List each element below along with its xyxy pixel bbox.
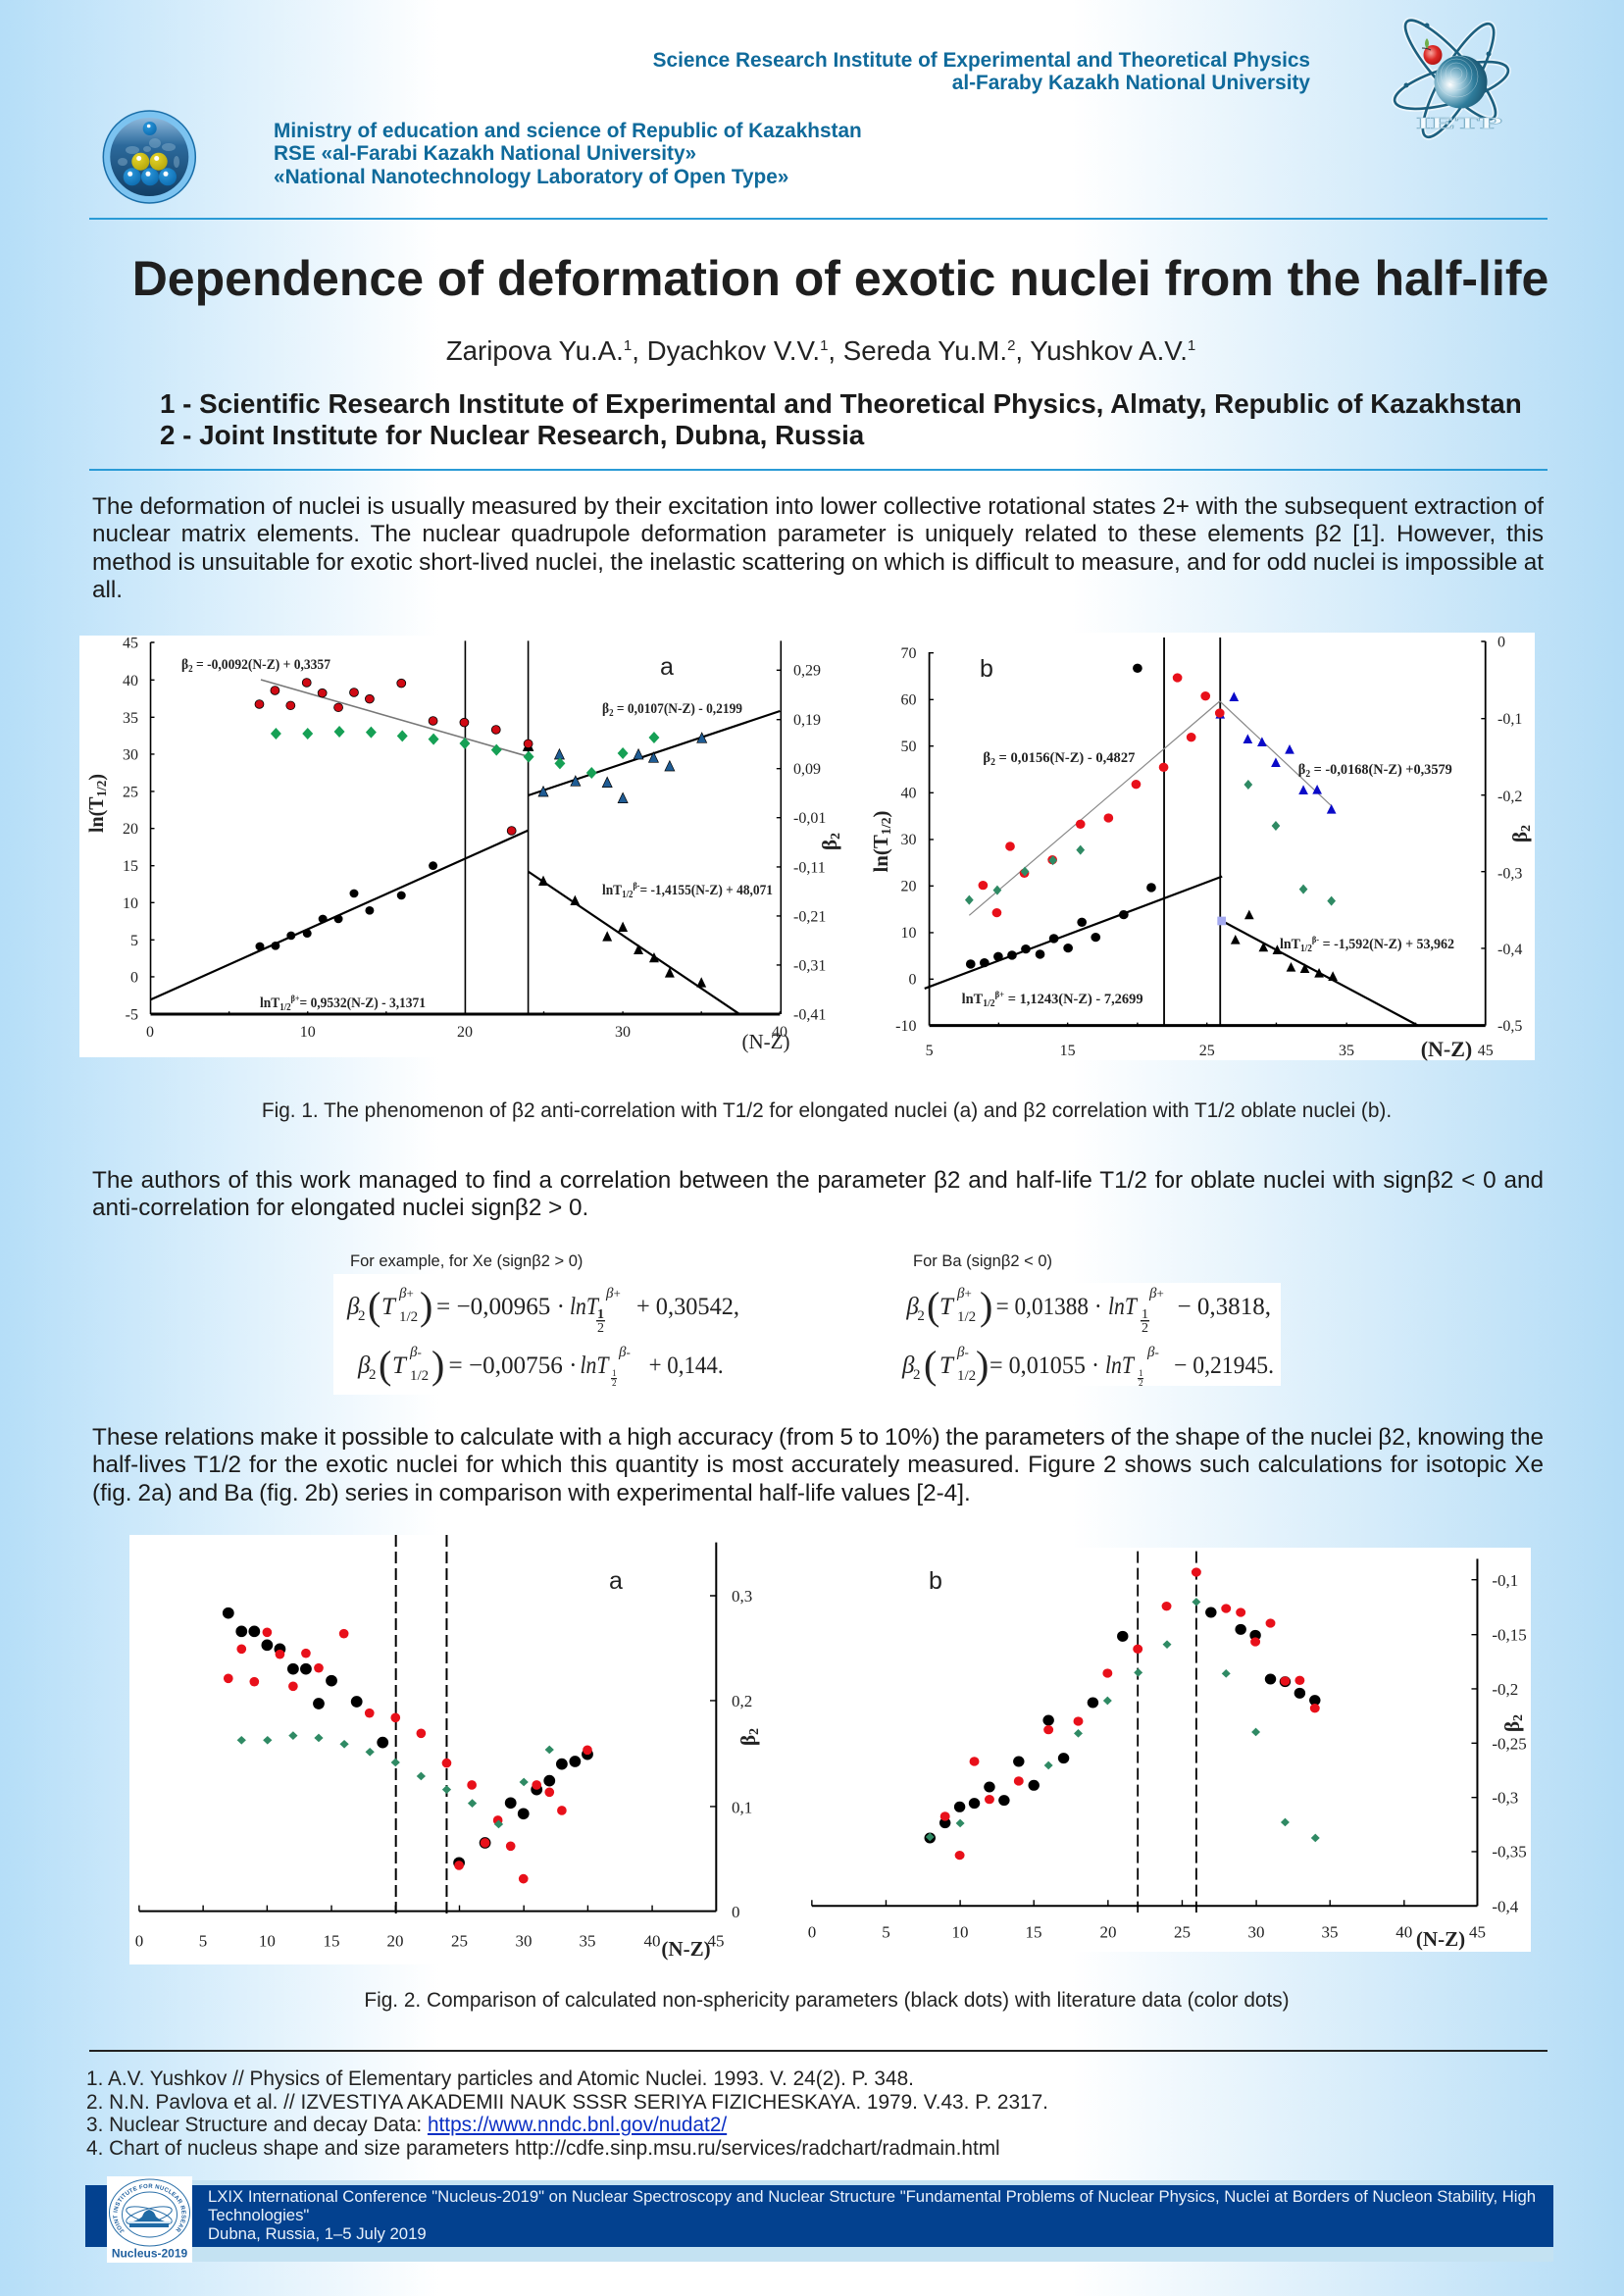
y axis title 1b: 1/2 [880, 817, 894, 835]
right axis title 2b: β [1500, 1721, 1524, 1732]
formula Ba beta minus: 2 [913, 1367, 920, 1383]
right axis numbers 2a: 0,3 [732, 1587, 752, 1606]
equations 1b: = -0,0168(N-Z) +0,3579 [1310, 762, 1452, 778]
right axis title 2b: 2 [1511, 1714, 1526, 1721]
formula Xe beta plus: 1 [597, 1307, 604, 1322]
x axis numbers 2a: 0 [135, 1932, 143, 1950]
equations 1a: β [602, 701, 610, 717]
right axis numbers 2b: -0,4 [1492, 1897, 1519, 1916]
formula Ba beta plus: lnT [1108, 1294, 1139, 1320]
equations 1b: β [983, 750, 990, 766]
equations 1b: 1/2 [1300, 944, 1312, 954]
x axis title 1a: (N-Z) [742, 1030, 789, 1053]
formula Ba beta minus: T [939, 1352, 955, 1379]
formula Xe beta minus: 1 [612, 1368, 616, 1378]
data points 2a [223, 1607, 593, 1883]
axes and guides 2a [139, 1535, 716, 1918]
right axis numbers 1b: -0,2 [1497, 789, 1522, 805]
equations 1a: 1/2 [279, 1002, 291, 1013]
heading: ministry and laboratory: RSE «al-Farabi Kazakh National University» [274, 142, 696, 165]
light band [192, 2180, 1553, 2262]
formula Xe beta plus: T [381, 1294, 397, 1320]
intro paragraph: nuclear matrix elements. The nuclear quadrupole deformation parameter is uniquely related to these elements β2 [1]. However, this [92, 521, 1544, 547]
formula Ba beta minus: lnT [1105, 1352, 1136, 1379]
intro paragraph: all. [92, 577, 123, 603]
right axis numbers 2b: -0,2 [1492, 1680, 1518, 1699]
relations paragraph: (fig. 2a) and Ba (fig. 2b) series in comparison with experimental half-life values [2-4]. [92, 1480, 971, 1506]
heading: institute name: Science Research Institute of Experimental and Theoretical Physics [653, 49, 1310, 72]
x axis numbers 1b: 5 [926, 1043, 934, 1059]
heading: institute name [653, 49, 1310, 94]
title: Dependence of deformation of exotic nuclei from the half-life [132, 251, 1548, 306]
y axis title 1b: ) [869, 810, 892, 817]
right axis numbers 2b [1492, 1571, 1527, 1916]
axis labels 1a: 25 [123, 785, 138, 800]
x axis numbers 2b: 20 [1100, 1922, 1116, 1942]
y axis title 1a: ) [84, 774, 108, 781]
label: Ba example: For Ba (signβ2 < 0) [913, 1252, 1052, 1270]
right axis numbers 2b: -0,3 [1492, 1789, 1518, 1807]
x axis numbers 2b: 0 [808, 1922, 816, 1942]
formula Ba beta plus: 2 [1142, 1321, 1148, 1336]
logo: IETP atom: IETP [1416, 114, 1502, 132]
x axis title 2a: (N-Z) [661, 1937, 711, 1961]
left axis numbers 1b: 40 [900, 785, 916, 802]
logo: JINR Nucleus-2019: Nucleus-2019 [112, 2246, 188, 2260]
intro paragraph: The deformation of nuclei is usually measured by their excitation into lower collective rotational states 2+ with the subsequent extraction of [92, 493, 1544, 520]
x axis numbers 1a [146, 1024, 787, 1041]
y axis title 1a: ln(T [84, 794, 108, 833]
left axis numbers 1b: 10 [900, 925, 916, 942]
x axis numbers 2b: 35 [1322, 1922, 1338, 1942]
x axis numbers 2a: 40 [643, 1932, 661, 1950]
axis labels 1a: 0 [130, 969, 138, 987]
equations 1b: = 0,0156(N-Z) - 0,4827 [995, 750, 1136, 766]
references: 2. N.N. Pavlova et al. // IZVESTIYA AKADEMII NAUK SSSR SERIYA FIZICHESKAYA. 1979. V.43. P. 2317. [86, 2091, 1048, 2114]
formula Ba beta plus: 2 [917, 1308, 925, 1324]
axis labels 1a: 10 [123, 895, 138, 912]
logo: IETP atom [1392, 18, 1511, 140]
x axis numbers 1a: 0 [146, 1024, 154, 1041]
text: JOINT INSTITUTE FOR NUCLEAR RESEARCH [113, 2183, 186, 2233]
intro paragraph: method is unsuitable for exotic short-lived nuclei, the inelastic scattering on which is difficult to measure, and for odd nuclei is impossible at [92, 549, 1544, 576]
x axis numbers 2a: 10 [259, 1932, 276, 1950]
x axis title 1b: (N-Z) [1421, 1037, 1472, 1061]
axis labels 1a: 45 [123, 636, 138, 651]
formula Ba beta plus: β+ [956, 1286, 972, 1301]
right axis numbers 1b [1497, 634, 1522, 1035]
right axis numbers 1a: -0,01 [793, 810, 826, 827]
formulas: Ba [901, 1283, 1281, 1388]
right axis numbers 1b: 0 [1497, 634, 1505, 651]
chart: figure 2a [129, 1535, 762, 1964]
x axis numbers 2a: 15 [324, 1932, 339, 1950]
correlation paragraph: anti-correlation for elongated nuclei signβ2 > 0. [92, 1195, 588, 1221]
formula Xe beta minus: ( [379, 1343, 391, 1387]
formula Ba beta minus [901, 1343, 1274, 1388]
conference text: Technologies" [208, 2206, 309, 2224]
formula Ba beta plus: 1/2 [957, 1309, 976, 1325]
left axis numbers 1b: -10 [895, 1018, 916, 1035]
formula Xe beta minus: 2 [369, 1367, 377, 1383]
formula Ba beta minus: = 0,01055 · [990, 1352, 1099, 1379]
heading: institute name: al-Faraby Kazakh National University [952, 72, 1310, 94]
equations 1b: β+ [995, 990, 1004, 999]
equations 1a: = -1,4155(N-Z) + 48,071 [639, 883, 773, 898]
x axis numbers 1a: 30 [615, 1024, 631, 1041]
equations 1a: = 0,9532(N-Z) - 3,1371 [300, 995, 426, 1011]
panel letter a: a [609, 1567, 623, 1595]
right axis numbers 2b: -0,1 [1492, 1571, 1518, 1590]
left axis numbers 1b: 70 [900, 645, 916, 662]
formula Xe beta minus [357, 1343, 724, 1388]
formula Ba beta minus: β- [956, 1345, 969, 1360]
panel letter a: a [660, 653, 674, 681]
right axis numbers 1a: -0,41 [793, 1006, 826, 1024]
axis labels 1a: 30 [123, 747, 138, 763]
equations 1a: 2 [609, 708, 614, 719]
formula Ba beta minus: ( [924, 1343, 937, 1387]
x axis numbers 2b: 25 [1174, 1922, 1191, 1942]
right axis numbers 1a: -0,11 [793, 859, 826, 877]
equations 1b: = 1,1243(N-Z) - 7,2699 [1004, 992, 1143, 1007]
intro paragraph [92, 493, 1544, 603]
formula Xe beta minus: β- [618, 1345, 631, 1360]
x axis numbers 2a: 20 [386, 1932, 404, 1950]
references: 4. Chart of nucleus shape and size parameters http://cdfe.sinp.msu.ru/services/radchart/radmain.html [86, 2137, 1000, 2160]
relations paragraph: half-lives T1/2 for the exotic nuclei for which this quantity is most accurately measured. Figure 2 shows such calculations for isotopic Xe [92, 1452, 1544, 1478]
axis labels 1a [123, 636, 138, 1024]
logo: JINR Nucleus-2019 [107, 2176, 192, 2263]
x axis numbers 1b: 15 [1060, 1043, 1076, 1059]
axis labels 1a: 15 [123, 858, 138, 875]
x axis numbers 1b: 45 [1478, 1043, 1494, 1059]
right axis title 1b: 2 [1519, 825, 1534, 832]
conference text [208, 2187, 1536, 2243]
relations paragraph [92, 1424, 1544, 1506]
formula Xe beta plus: β+ [398, 1286, 414, 1301]
axes and trend lines 1a [151, 640, 781, 1014]
right axis numbers 1a: 0,29 [793, 663, 821, 679]
equations 1a: = -0,0092(N-Z) + 0,3357 [193, 657, 330, 673]
left axis numbers 1b: 50 [900, 739, 916, 755]
heading: ministry and laboratory: «National Nanotechnology Laboratory of Open Type» [274, 166, 788, 188]
references: 3. Nuclear Structure and decay Data: https://www.nndc.bnl.gov/nudat2/ [86, 2114, 727, 2136]
formula Xe beta plus: + 0,30542, [636, 1294, 739, 1320]
heading: ministry and laboratory: Ministry of education and science of Republic of Kazakhstan [274, 120, 862, 142]
x axis numbers 1a: 10 [300, 1024, 316, 1041]
right axis numbers 1b: -0,5 [1497, 1018, 1522, 1035]
formula Ba beta plus: ( [927, 1284, 939, 1328]
right axis numbers 2b: -0,15 [1492, 1626, 1527, 1644]
left axis numbers 1b: 30 [900, 832, 916, 848]
formula Xe beta minus: β- [409, 1345, 422, 1360]
formula Xe beta minus: + 0,144. [649, 1352, 724, 1379]
equations 1b: β [1298, 762, 1306, 778]
conference text: Dubna, Russia, 1–5 July 2019 [208, 2224, 427, 2243]
x axis numbers 2b: 15 [1026, 1922, 1041, 1942]
formula Ba beta plus: 1 [1142, 1307, 1148, 1322]
right axis title 1a: β [818, 840, 841, 850]
affiliations: 2 - Joint Institute for Nuclear Research, Dubna, Russia [160, 420, 864, 449]
formula Ba beta plus: T [939, 1294, 955, 1320]
formula Xe beta plus: 1/2 [399, 1309, 418, 1325]
formula Xe beta plus: ) [420, 1284, 432, 1328]
formula Xe beta plus: β+ [605, 1286, 621, 1301]
chart: figure 1b [869, 633, 1535, 1061]
axis labels 1a: 35 [123, 710, 138, 727]
axes and guides 2b [812, 1552, 1477, 1913]
x axis numbers 1b: 25 [1199, 1043, 1215, 1059]
equations 1b: = -1,592(N-Z) + 53,962 [1319, 937, 1454, 952]
x axis numbers 2b: 40 [1396, 1922, 1412, 1942]
formula Ba beta minus: 2 [1139, 1378, 1143, 1388]
right axis numbers 1a: -0,21 [793, 908, 826, 926]
correlation paragraph [92, 1167, 1544, 1221]
formula Xe beta plus: = −0,00965 · [436, 1294, 565, 1320]
caption: figure 2: Fig. 2. Comparison of calculated non-sphericity parameters (black dots) with literature data (color dots) [364, 1989, 1290, 2012]
equations 1a [181, 657, 773, 1013]
affiliations [160, 388, 1522, 449]
equations 1b: 2 [990, 757, 995, 768]
right axis title 1b: β [1508, 832, 1532, 842]
caption: figure 1: Fig. 1. The phenomenon of β2 anti-correlation with T1/2 for elongated nuclei (a) and β2 correlation with T1/2 oblate nuclei (b). [262, 1099, 1392, 1122]
formula Xe beta plus: β [346, 1294, 360, 1320]
formula Ba beta plus: β+ [1148, 1286, 1164, 1301]
equations 1a: β [181, 657, 189, 673]
x axis numbers 1a: 40 [772, 1024, 787, 1041]
conference text: LXIX International Conference "Nucleus-2019" on Nuclear Spectroscopy and Nuclear Structure "Fundamental Problems of Nuclear Physics, Nuclei at Borders of Nucleon Stability, High [208, 2187, 1536, 2206]
formula Xe beta minus: = −0,00756 · [449, 1352, 577, 1379]
formula Ba beta minus: β- [1146, 1345, 1159, 1360]
axes and trend lines 1b [925, 638, 1486, 1026]
equations 1a: 2 [188, 664, 193, 675]
formula Ba beta minus: ) [976, 1343, 989, 1387]
axis labels 1a: 40 [123, 673, 138, 689]
x axis numbers 2b: 45 [1469, 1922, 1486, 1942]
equations 1a: lnT [602, 883, 625, 898]
equations 1a: β- [634, 881, 639, 891]
formula Xe beta minus: lnT [581, 1352, 610, 1379]
right axis numbers 2a: 0,2 [732, 1692, 752, 1710]
equations 1b: 1/2 [983, 998, 995, 1009]
formula Xe beta plus [346, 1284, 739, 1336]
formula Xe beta plus: 2 [597, 1321, 604, 1336]
equations 1a: β+ [291, 994, 300, 1003]
formula Xe beta plus: lnT [570, 1294, 600, 1320]
equations 1b: 2 [1305, 769, 1310, 780]
right axis title 1a: 2 [829, 833, 843, 840]
chart: figure 1a [79, 636, 843, 1057]
right axis numbers 1b: -0,1 [1497, 711, 1522, 728]
affiliations: 1 - Scientific Research Institute of Experimental and Theoretical Physics, Almaty, Republic of Kazakhstan [160, 388, 1522, 419]
conference bar [85, 2185, 1553, 2247]
equations 1b: lnT [1280, 937, 1302, 952]
y axis title 1a: 1/2 [95, 781, 110, 797]
x axis numbers 2b: 5 [882, 1922, 890, 1942]
formula Xe beta plus: ( [368, 1284, 381, 1328]
panel letter b: b [929, 1567, 942, 1595]
right axis numbers 2b: -0,25 [1492, 1734, 1527, 1754]
formula Xe beta minus: T [392, 1352, 408, 1379]
formula Ba beta plus: ) [980, 1284, 992, 1328]
formula Ba beta minus: − 0,21945. [1174, 1352, 1274, 1379]
right axis title 2a: β [736, 1735, 760, 1746]
formula Ba beta plus [905, 1284, 1271, 1336]
x axis numbers 2b: 10 [951, 1922, 969, 1942]
x axis numbers 1a: 20 [457, 1024, 473, 1041]
x axis title 2b: (N-Z) [1416, 1927, 1465, 1951]
right axis numbers 1a: 0,09 [793, 761, 821, 778]
label: Xe example: For example, for Xe (signβ2 > 0) [350, 1252, 583, 1270]
x axis numbers 2a: 45 [708, 1932, 724, 1950]
chart: figure 2b [808, 1548, 1531, 1952]
right axis numbers 2b: -0,35 [1492, 1842, 1527, 1862]
x axis numbers 2a [135, 1932, 724, 1950]
left axis numbers 1b: 60 [900, 692, 916, 708]
logo: national nanotechnology laboratory [102, 110, 196, 204]
references: 1. A.V. Yushkov // Physics of Elementary particles and Atomic Nuclei. 1993. V. 24(2). P. 348. [86, 2067, 914, 2090]
x axis numbers 2a: 30 [516, 1932, 532, 1950]
data points 1b [965, 664, 1338, 981]
equations 1a: lnT [260, 995, 282, 1011]
right axis numbers 1b: -0,4 [1497, 942, 1522, 958]
axis labels 1a: 20 [123, 821, 138, 838]
left axis numbers 1b: 20 [900, 879, 916, 894]
references [86, 2067, 1048, 2160]
data points 2b [925, 1567, 1321, 1860]
formula Xe beta minus: 2 [612, 1378, 616, 1388]
formula Xe beta minus: ) [431, 1343, 444, 1387]
right axis title 2a: 2 [747, 1728, 762, 1735]
x axis numbers 1b: 35 [1339, 1043, 1354, 1059]
right axis numbers 2a: 0,1 [732, 1799, 752, 1816]
right axis numbers 2a: 0 [732, 1903, 739, 1921]
formulas: Xe [333, 1274, 739, 1395]
equations 1b: β- [1312, 935, 1319, 944]
left axis numbers 1b: 0 [908, 971, 916, 989]
formula Xe beta minus: β [357, 1352, 371, 1379]
formula Ba beta minus: β [901, 1352, 915, 1379]
formula Ba beta plus: = 0,01388 · [996, 1294, 1102, 1320]
equations 1b [962, 750, 1454, 1009]
formula Xe beta plus: 2 [358, 1308, 365, 1324]
left axis numbers 1b [895, 645, 916, 1035]
equations 1b: lnT [962, 992, 984, 1007]
right axis numbers 1a: 0,19 [793, 712, 821, 729]
data points 1a [255, 679, 707, 988]
footer band [85, 2180, 1553, 2262]
formula Xe beta minus: 1/2 [410, 1368, 429, 1384]
formula Ba beta minus: 1 [1139, 1368, 1143, 1378]
heading: ministry and laboratory [274, 120, 862, 188]
formula Ba beta minus: 1/2 [957, 1368, 976, 1384]
authors: Zaripova Yu.A.1, Dyachkov V.V.1, Sereda Yu.M.2, Yushkov A.V.1 [446, 335, 1195, 366]
formula Ba beta plus: β [905, 1294, 919, 1320]
x axis numbers 2a: 25 [451, 1932, 468, 1950]
x axis numbers 2a: 5 [199, 1932, 207, 1950]
formula Ba beta plus: − 0,3818, [1177, 1294, 1271, 1320]
x axis numbers 1b [926, 1043, 1494, 1059]
axis labels 1a: 5 [130, 933, 138, 949]
x axis numbers 2b: 30 [1247, 1922, 1265, 1942]
y axis title 1b: ln(T [869, 835, 892, 873]
axis labels 1a: -5 [126, 1006, 138, 1024]
right axis numbers 2a [732, 1587, 752, 1921]
correlation paragraph: The authors of this work managed to find a correlation between the parameter β2 and half-life T1/2 for oblate nuclei with signβ2 < 0 and [92, 1167, 1544, 1194]
equations 1a: 1/2 [622, 890, 634, 900]
x axis numbers 2a: 35 [579, 1932, 596, 1950]
x axis numbers 2b [808, 1922, 1486, 1942]
right axis numbers 1b: -0,3 [1497, 865, 1522, 883]
equations 1a: = 0,0107(N-Z) - 0,2199 [614, 701, 742, 717]
right axis numbers 1a: -0,31 [793, 957, 826, 975]
panel letter b: b [980, 655, 993, 683]
right axis numbers 1a [793, 663, 826, 1024]
relations paragraph: These relations make it possible to calculate with a high accuracy (from 5 to 10%) the parameters of the shape of the nuclei β2, knowing the [92, 1424, 1544, 1451]
